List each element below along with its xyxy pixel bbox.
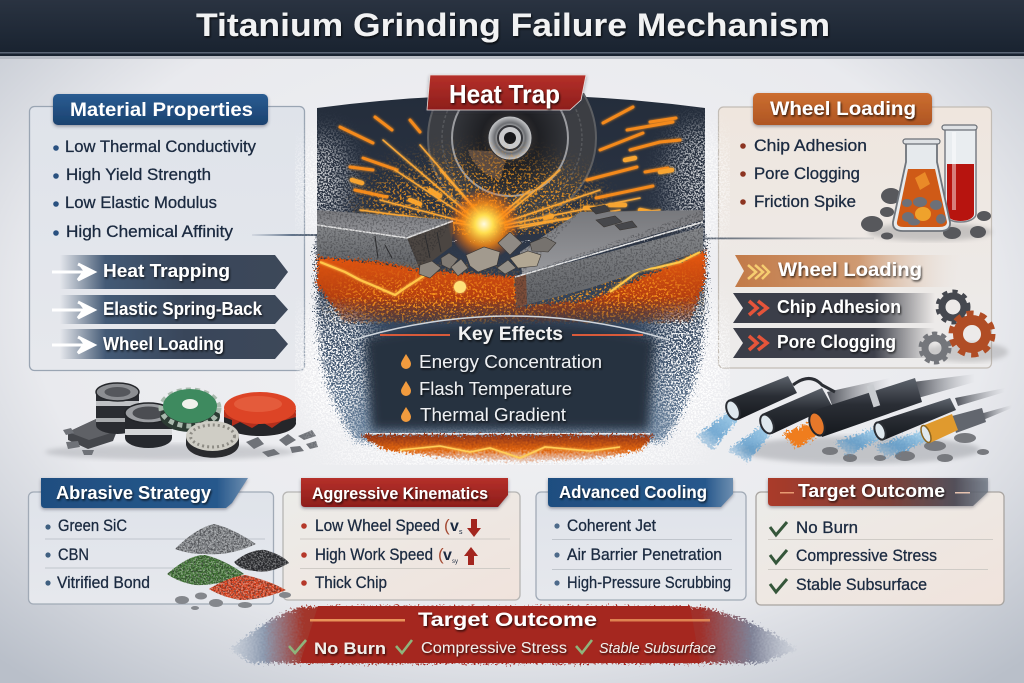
panel: heat trap scene <box>295 54 730 465</box>
heading: heat trap: Heat Trap <box>449 79 560 109</box>
heading: wheel loading: Wheel Loading <box>770 99 916 120</box>
icon: coolant nozzles <box>696 374 1012 464</box>
icon: grinding wheels group <box>45 383 318 460</box>
heading: target outcome: Target Outcome <box>798 481 945 501</box>
key effects list: Energy Concentration <box>419 352 602 372</box>
heading: aggressive kinematics <box>301 478 508 507</box>
nozzle 1 <box>696 376 797 450</box>
green gear wheel <box>160 389 220 432</box>
property list: High Yield Strength <box>66 165 211 184</box>
property list: High Chemical Affinity <box>66 222 233 241</box>
ribbon: wheel loading <box>52 329 288 359</box>
cooling list: Air Barrier Penetration <box>567 545 722 564</box>
connector line left <box>252 234 318 236</box>
rocks <box>175 592 291 610</box>
kinematics list: s <box>459 529 463 536</box>
banner: target outcome: Stable Subsurface <box>599 640 716 657</box>
property list: Low Thermal Conductivity <box>65 137 256 156</box>
dark pile <box>234 550 289 572</box>
panel: abrasive strategy <box>28 478 274 604</box>
wheel stack 2 <box>125 403 172 448</box>
heading: target outcome <box>768 478 988 506</box>
red disc <box>224 392 296 436</box>
ribbon: elastic spring-back: Elastic Spring-Back <box>103 299 263 319</box>
workpiece right <box>515 210 703 307</box>
red pile <box>209 575 286 600</box>
kinematics list: High Work Speed <box>315 545 433 564</box>
kinematics list: Low Wheel Speed <box>315 516 440 535</box>
key effects list: Thermal Gradient <box>420 405 566 425</box>
property list: Low Elastic Modulus <box>65 193 217 212</box>
ribbon: pore clogging <box>733 328 935 358</box>
banner: target outcome: No Burn <box>314 639 386 658</box>
grain texture <box>167 524 289 600</box>
hoses <box>793 374 1012 420</box>
outcome list <box>768 518 993 594</box>
green pile <box>167 555 244 585</box>
ribbon: chip adhesion: Chip Adhesion <box>777 297 901 317</box>
icon: abrasive grain piles <box>165 520 291 610</box>
scene backdrop <box>295 90 730 465</box>
nozzle 4 <box>836 398 956 456</box>
panel: aggressive kinematics <box>283 478 520 600</box>
white abrasive disc <box>186 421 239 458</box>
ribbon: heat trapping: Heat Trapping <box>103 261 230 281</box>
heading: key effects: Key Effects <box>458 324 563 345</box>
connector line right <box>704 238 874 239</box>
heading: aggressive kinematics: Aggressive Kinematics <box>312 484 488 503</box>
workpiece left <box>317 210 453 270</box>
banner: target outcome: Target Outcome <box>418 609 597 631</box>
heading: wheel loading <box>753 93 932 125</box>
spark embers <box>343 140 616 235</box>
kinematics list: ( <box>438 545 444 564</box>
icon: gears <box>921 292 1008 362</box>
abrasive list: CBN <box>58 545 89 564</box>
outcome list: Compressive Stress <box>796 546 937 565</box>
title bar: Titanium Grinding Failure Mechanism <box>196 7 830 43</box>
property list <box>53 137 256 241</box>
heading: material properties <box>53 94 268 125</box>
grinding wheel <box>427 93 597 223</box>
key effects list: Flash Temperature <box>419 379 572 399</box>
rocks <box>63 428 318 457</box>
kinematics list: v <box>443 547 452 564</box>
slab surface grain <box>317 205 707 310</box>
abrasive list: Green SiC <box>58 516 127 535</box>
kinematics list: Thick Chip <box>315 573 387 592</box>
wheel loading list: Friction Spike <box>754 192 856 211</box>
kinematics list <box>300 516 510 592</box>
cooling list <box>552 516 732 592</box>
panel: target outcome <box>756 478 1004 605</box>
grey pile <box>175 524 256 554</box>
rocks under nozzles <box>822 433 989 462</box>
ribbon: pore clogging: Pore Clogging <box>777 332 896 352</box>
title bar <box>0 0 1024 59</box>
heading: heat trap <box>427 75 586 110</box>
key effects list <box>401 352 602 425</box>
ribbon: wheel loading tan <box>735 255 960 287</box>
wheel loading list: Pore Clogging <box>754 164 860 183</box>
panel: advanced cooling <box>536 478 746 600</box>
outcome list: No Burn <box>796 518 858 537</box>
rock fragments <box>419 205 637 278</box>
icon: test tube <box>942 125 977 222</box>
kinematics list: sy <box>452 559 458 565</box>
heading: advanced cooling <box>548 478 733 507</box>
ribbon: chip adhesion <box>733 293 935 323</box>
icon: rocks under flasks <box>861 188 992 241</box>
key effects block <box>353 316 670 430</box>
lava strip <box>360 433 655 462</box>
ribbon: elastic spring-back <box>52 295 288 324</box>
nozzle 5 orange collar <box>874 408 986 458</box>
outcome list: Stable Subsurface <box>796 575 927 594</box>
ribbon: wheel loading tan: Wheel Loading <box>778 260 922 281</box>
ribbon: heat trapping <box>52 255 288 289</box>
sparks flash <box>448 188 520 260</box>
ribbon: wheel loading: Wheel Loading <box>103 334 224 354</box>
icon: flask <box>893 139 950 231</box>
heading: abrasive strategy: Abrasive Strategy <box>56 483 211 503</box>
abrasive list: Vitrified Bond <box>57 573 150 592</box>
wheel loading list: Chip Adhesion <box>754 136 867 155</box>
cooling list: High-Pressure Scrubbing <box>567 573 731 592</box>
nozzle 2 <box>728 388 832 462</box>
wheel loading list <box>740 136 867 211</box>
panel: wheel loading <box>718 93 1008 368</box>
cooling list: Coherent Jet <box>567 516 656 535</box>
abrasive list <box>45 516 265 592</box>
kinematics list: ( <box>444 516 450 535</box>
kinematics list: v <box>450 518 459 535</box>
banner: target outcome: Compressive Stress <box>421 640 567 657</box>
panel: material properties <box>30 94 304 370</box>
heading: abrasive strategy <box>41 478 248 508</box>
nozzle 3 with sparks <box>783 378 922 448</box>
sparks <box>340 107 680 228</box>
wheel stack 1 <box>96 383 139 434</box>
heading: advanced cooling: Advanced Cooling <box>559 482 707 502</box>
banner: target outcome <box>230 606 797 663</box>
molten lava crack <box>317 250 705 324</box>
heading: material properties: Material Properties <box>70 100 253 121</box>
